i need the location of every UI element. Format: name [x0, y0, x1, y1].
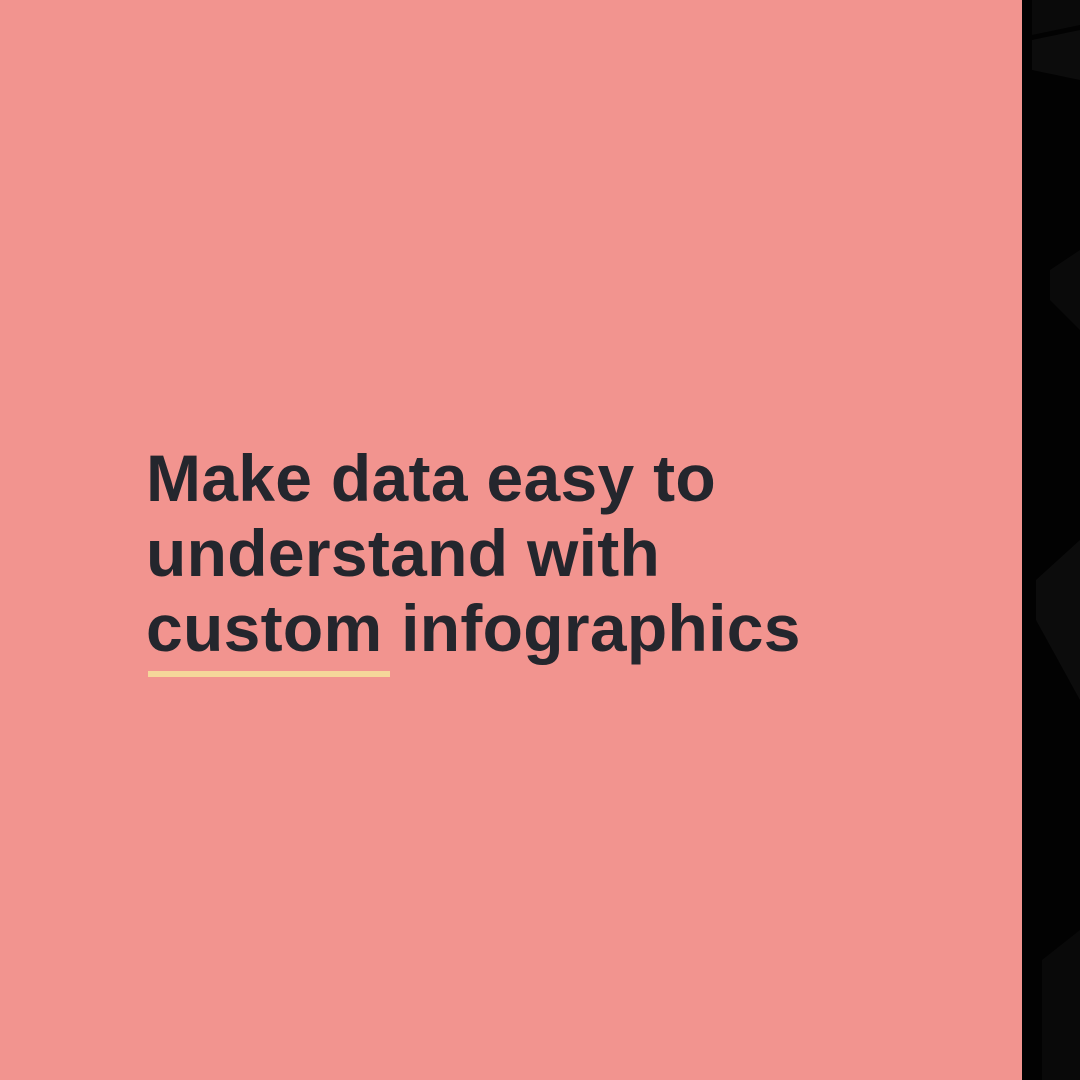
underline accent — [148, 671, 390, 677]
title: understand with — [146, 516, 660, 590]
panel: dark right strip — [1022, 0, 1080, 1080]
title: custom infographics — [146, 591, 801, 665]
title: Make data easy to — [146, 441, 716, 515]
title — [146, 441, 801, 665]
